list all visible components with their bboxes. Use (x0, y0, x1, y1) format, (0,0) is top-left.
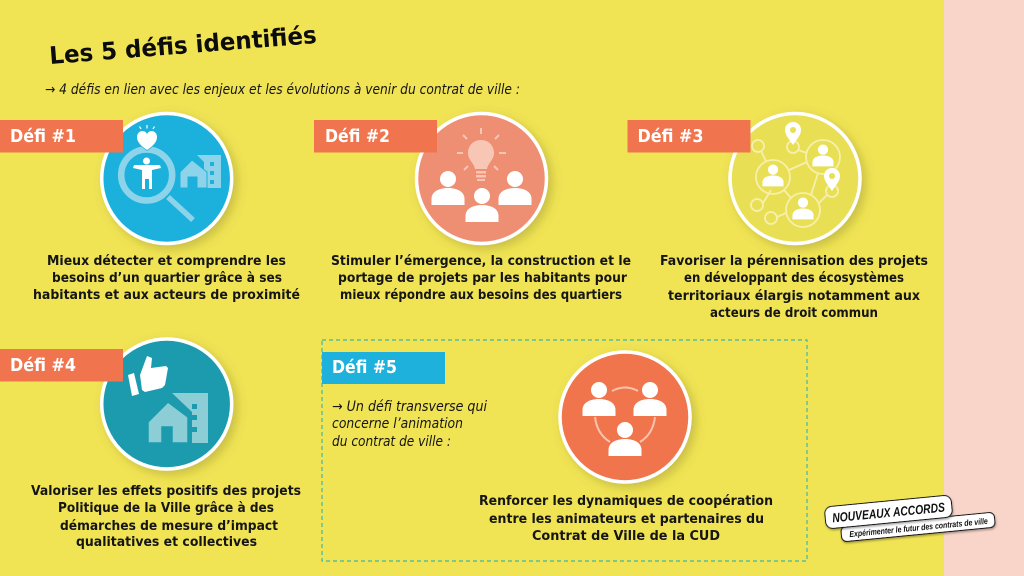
title: Les 5 défis identifiés (48, 21, 318, 70)
text: défi 1 (33, 253, 300, 303)
text: défi 5 intro (332, 399, 487, 450)
three people (582, 382, 666, 456)
text: défi 2: mieux répondre aux besoins des quartiers (340, 287, 622, 303)
tag: défi 3: Défi #3 (638, 127, 704, 147)
text: défi 5: entre les animateurs et partenaires du (489, 511, 764, 527)
tag: défi 2 (314, 120, 437, 152)
logo: Nouveaux Accords (824, 495, 995, 542)
logo: Nouveaux Accords: NOUVEAUX ACCORDS (832, 500, 946, 525)
icon: défi 5 circle (560, 352, 690, 482)
text: défi 5 intro: → Un défi transverse qui (332, 399, 487, 415)
right pink band (944, 0, 1024, 576)
icon: thumbs up (128, 356, 168, 396)
text: défi 3: Favoriser la pérennisation des projets (660, 253, 928, 269)
icon: three people (432, 171, 532, 222)
text: défi 5: Renforcer les dynamiques de coopération (479, 493, 773, 509)
icon: défi 3 network circle (730, 114, 860, 244)
text: défi 5 (479, 493, 773, 544)
text: défi 4: qualitatives et collectives (76, 534, 257, 550)
text: défi 2: Stimuler l’émergence, la construction et le (331, 253, 631, 269)
icon: heart (137, 125, 157, 150)
text: défi 4 (31, 483, 301, 550)
icon: défi 1 circle (102, 114, 232, 244)
text: défi 2: portage de projets par les habitants pour (338, 270, 627, 286)
panel: défi 2 (314, 114, 631, 303)
tag: défi 2: Défi #2 (325, 127, 390, 147)
logo: Nouveaux Accords: Expérimenter le futur des contrats de ville (849, 516, 988, 539)
text: défi 3: acteurs de droit commun (710, 305, 878, 321)
panel: défi 3 (628, 114, 928, 321)
panel: défi 4 (0, 339, 301, 550)
icon: défi 2 circle (416, 114, 546, 244)
text: défi 4: démarches de mesure d’impact (60, 518, 278, 534)
icon: house and building (148, 393, 208, 443)
cooperation arcs (595, 388, 655, 442)
tag: défi 5 (322, 352, 445, 384)
text: défi 1: habitants et aux acteurs de proximité (33, 287, 300, 303)
tag: défi 1 (0, 120, 123, 152)
text: défi 4: Politique de la Ville grâce à des (58, 500, 274, 516)
text: défi 1: besoins d’un quartier grâce à ses (52, 270, 282, 286)
text: défi 1: Mieux détecter et comprendre les (47, 253, 286, 269)
pins (785, 122, 840, 191)
text: défi 3 (660, 253, 928, 321)
tag: défi 4 (0, 349, 123, 382)
text: défi 3: territoriaux élargis notamment aux (668, 288, 920, 304)
panel: défi 1 (0, 114, 300, 303)
subtitle: → 4 défis en lien avec les enjeux et les évolutions à venir du contrat de ville : (45, 82, 520, 98)
text: défi 5 intro: du contrat de ville : (332, 434, 451, 450)
tag: défi 3 (628, 120, 750, 152)
text: défi 5: Contrat de Ville de la CUD (532, 528, 720, 544)
tag: défi 4: Défi #4 (10, 356, 76, 376)
icon: light bulb (457, 128, 506, 181)
people in network (762, 145, 834, 219)
icon: magnifier (121, 150, 193, 220)
icon: défi 4 circle (102, 339, 232, 469)
icon: houses (180, 155, 221, 188)
text: défi 5 intro: concerne l’animation (332, 416, 463, 432)
tag: défi 5: Défi #5 (332, 358, 397, 378)
tag: défi 1: Défi #1 (10, 127, 76, 147)
text: défi 2 (331, 253, 631, 303)
text: défi 3: en développant des écosystèmes (684, 270, 904, 286)
text: défi 4: Valoriser les effets positifs des projets (31, 483, 301, 499)
network links (751, 140, 840, 227)
panel: défi 5 dashed box (322, 340, 807, 561)
